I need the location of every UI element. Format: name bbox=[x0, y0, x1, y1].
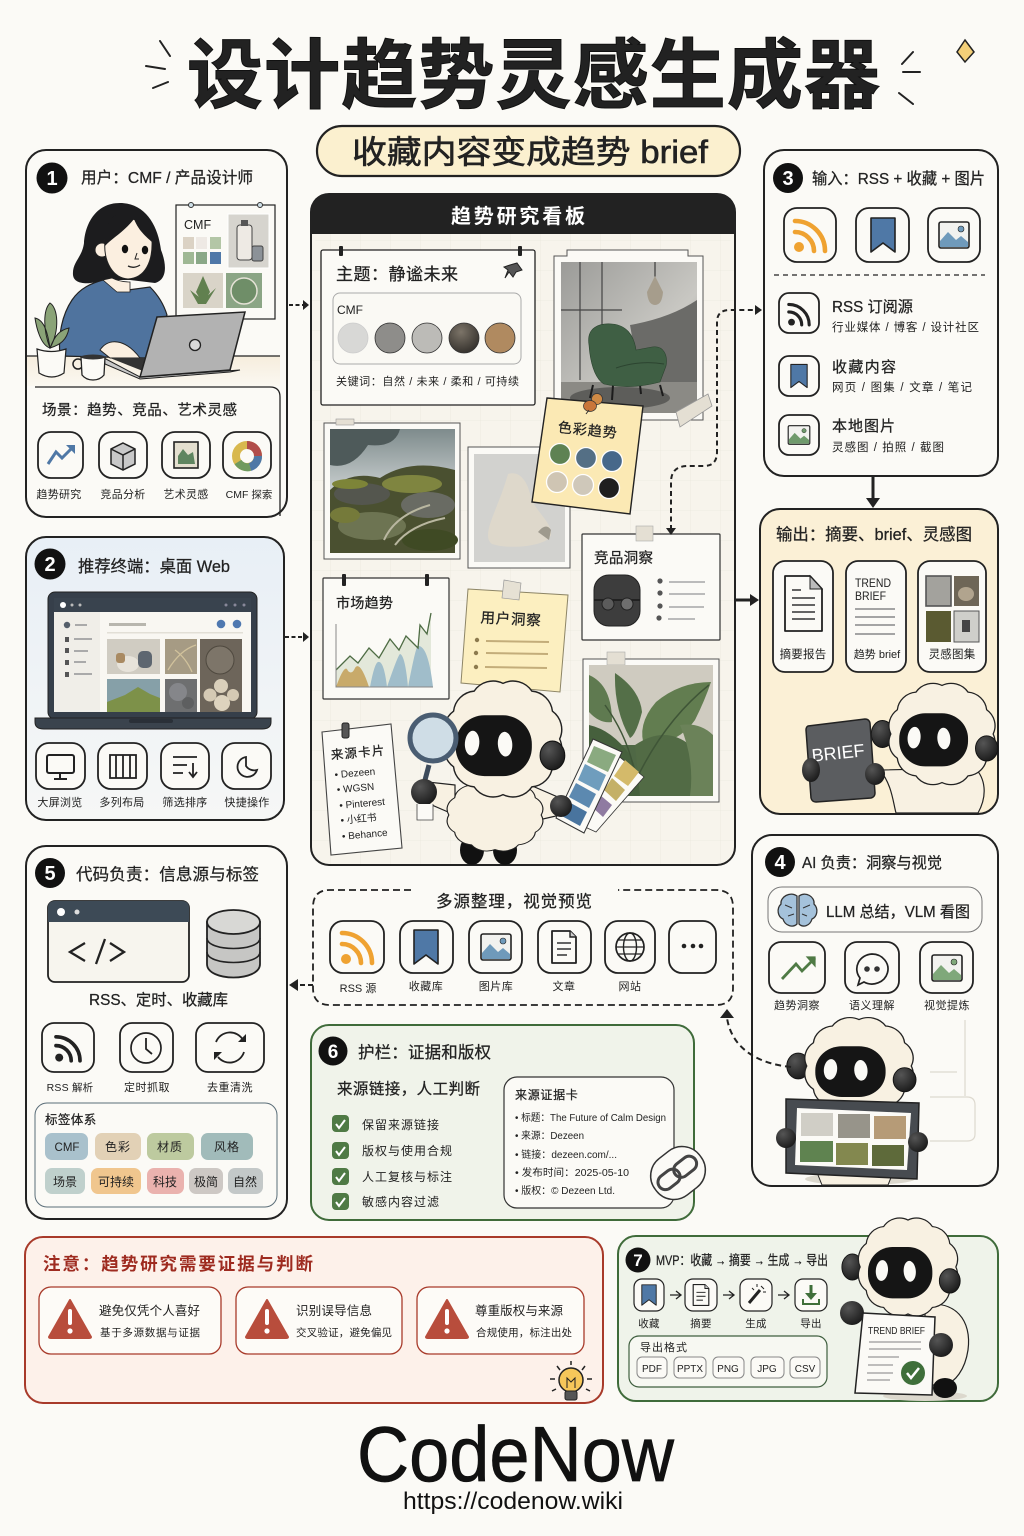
icon: RSS source: RSS 源 bbox=[340, 981, 376, 995]
card: trend brief: 趋势 brief bbox=[854, 648, 901, 661]
warning card 3: 尊重版权与来源 bbox=[475, 1303, 563, 1318]
icon: filter sort bbox=[161, 743, 209, 809]
row: saved content: 收藏内容 bbox=[832, 359, 896, 376]
card: source list: 来源卡片 bbox=[330, 744, 386, 762]
arrow bbox=[670, 1291, 681, 1299]
colour swatch fan bbox=[556, 739, 644, 833]
warning card 3: 合规使用，标注出处 bbox=[476, 1326, 572, 1339]
icon: color wheel bbox=[223, 432, 272, 501]
title: 设计趋势灵感生成器 bbox=[187, 34, 880, 119]
earbuds case bbox=[594, 575, 640, 626]
tags: 风格 bbox=[214, 1139, 240, 1154]
mascot: sheep with magnifier and swatches bbox=[410, 681, 644, 865]
potted plant bbox=[35, 303, 69, 377]
trend brief document bbox=[855, 1313, 935, 1395]
badge 6: 6 bbox=[328, 1042, 338, 1063]
card: source list: • 小红书 bbox=[340, 811, 377, 827]
subtitle pill: 收藏内容变成趋势 brief bbox=[352, 134, 708, 170]
icon: multi column: 多列布局 bbox=[99, 795, 145, 809]
badge 4: 4 bbox=[774, 852, 786, 874]
icon: color wheel: CMF 探索 bbox=[226, 488, 272, 501]
badge 6 bbox=[318, 1036, 348, 1066]
checklist bbox=[332, 1115, 453, 1210]
icon: article: 文章 bbox=[552, 979, 576, 993]
flow step: generate: 生成 bbox=[745, 1317, 767, 1330]
icon: scheduled fetch bbox=[120, 1023, 173, 1094]
icon: competitor analysis: 竞品分析 bbox=[100, 487, 146, 501]
panel 3: input bbox=[764, 150, 998, 476]
flow step: export bbox=[795, 1279, 827, 1330]
trend brief document: TREND BRIEF bbox=[868, 1326, 925, 1337]
icon: art inspiration bbox=[162, 432, 210, 501]
flow step: generate bbox=[740, 1279, 772, 1330]
tags: 材质 bbox=[157, 1140, 183, 1154]
tags: 场景 bbox=[53, 1175, 77, 1189]
flow step: summary bbox=[685, 1279, 717, 1330]
LLM pill: LLM 总结，VLM 看图 bbox=[826, 903, 970, 921]
source evidence card: • 版权：© Dezeen Ltd. bbox=[515, 1184, 615, 1197]
icon: deduplicate: 去重清洗 bbox=[207, 1080, 253, 1094]
row: RSS subscription: 行业媒体 / 博客 / 设计社区 bbox=[832, 320, 979, 334]
icon: image library bbox=[469, 921, 522, 993]
subheading: source links: 来源链接，人工判断 bbox=[337, 1080, 480, 1098]
photo: green chair bbox=[554, 250, 703, 420]
card: competitor insight bbox=[582, 526, 720, 640]
icon: article bbox=[538, 921, 591, 993]
card: market trend: 市场趋势 bbox=[336, 595, 393, 611]
sticky note: colour trend bbox=[532, 394, 643, 514]
source evidence card: • 来源：Dezeen bbox=[515, 1129, 584, 1142]
flow step: export: 导出 bbox=[800, 1317, 822, 1330]
card: source list: • Dezeen bbox=[334, 767, 376, 781]
icon: visual extraction: 视觉提炼 bbox=[924, 998, 970, 1012]
icon: large screen bbox=[36, 743, 85, 809]
icon: filter sort: 筛选排序 bbox=[162, 795, 208, 809]
icon: website bbox=[605, 921, 655, 993]
code window bbox=[48, 901, 189, 982]
row: RSS subscription: RSS 订阅源 bbox=[832, 298, 913, 316]
checklist: 人工复核与标注 bbox=[362, 1169, 453, 1184]
icon: more bbox=[669, 921, 716, 973]
icon: RSS parsing: RSS 解析 bbox=[47, 1081, 94, 1094]
tags: 极简 bbox=[194, 1175, 218, 1189]
panel 7: MVP bbox=[618, 1218, 998, 1401]
icon: link badge bbox=[642, 1138, 714, 1208]
heading: MVP: MVP：收藏 → 摘要 → 生成 → 导出 bbox=[656, 1252, 828, 1268]
icon: trend research bbox=[36, 432, 83, 501]
heading: output: 输出：摘要、brief、灵感图 bbox=[776, 525, 972, 544]
arrow bbox=[723, 1291, 734, 1299]
LLM pill bbox=[768, 887, 982, 932]
heading: warning: 注意：趋势研究需要证据与判断 bbox=[43, 1254, 314, 1274]
arrow: terminal to board bbox=[285, 632, 309, 642]
illustration: designer at laptop bbox=[60, 203, 245, 379]
heading: user: 用户：CMF / 产品设计师 bbox=[81, 169, 253, 187]
badge 3 bbox=[773, 163, 803, 193]
theme card bbox=[321, 246, 535, 405]
tape bbox=[676, 394, 712, 427]
panel 1: user bbox=[26, 150, 287, 517]
row: local images bbox=[779, 415, 944, 455]
tags bbox=[45, 1133, 263, 1194]
subtitle pill bbox=[317, 126, 740, 176]
checklist: 版权与使用合规 bbox=[362, 1143, 453, 1158]
icon: RSS orange bbox=[784, 208, 836, 262]
heading: input: 输入：RSS + 收藏 + 图片 bbox=[812, 170, 985, 188]
mascot: sheep with trend brief bbox=[840, 1218, 969, 1401]
mascot: sheep with tablet bbox=[776, 1018, 928, 1185]
tags: 色彩 bbox=[105, 1140, 131, 1154]
laptop illustration bbox=[35, 592, 271, 729]
warning card 2: 交叉验证，避免偏见 bbox=[296, 1326, 392, 1339]
tablet gallery bbox=[786, 1099, 919, 1179]
tags: 可持续 bbox=[98, 1174, 134, 1189]
warning card 2: 识别误导信息 bbox=[296, 1303, 372, 1318]
scene heading: 场景：趋势、竞品、艺术灵感 bbox=[42, 401, 237, 419]
card: inspiration set: 灵感图集 bbox=[929, 647, 976, 661]
warning card 2 bbox=[236, 1287, 402, 1354]
panel: multi-source preview bbox=[313, 890, 733, 1005]
icon: trend insight: 趋势洞察 bbox=[774, 998, 820, 1012]
tags: 科技 bbox=[153, 1175, 177, 1189]
card: source list: • Pinterest bbox=[339, 797, 386, 812]
warning card 1: 避免仅凭个人喜好 bbox=[99, 1303, 200, 1318]
card: trend brief: BRIEF bbox=[855, 589, 886, 603]
warning card 1 bbox=[39, 1287, 221, 1354]
icon: light bulb bbox=[550, 1361, 592, 1400]
heading: multi-source: 多源整理，视觉预览 bbox=[436, 892, 592, 911]
caption: RSS, schedule, library: RSS、定时、收藏库 bbox=[89, 991, 228, 1009]
icon: image bbox=[928, 208, 980, 262]
dashed arrow: mascot to sources bbox=[720, 1009, 791, 1067]
icon: art inspiration: 艺术灵感 bbox=[163, 488, 209, 501]
export formats card: CSV bbox=[795, 1364, 816, 1375]
source evidence card: 来源证据卡 bbox=[515, 1088, 579, 1102]
row: RSS subscription bbox=[779, 293, 979, 334]
row: local images: 灵感图 / 拍照 / 截图 bbox=[832, 440, 944, 454]
heading: AI: AI 负责：洞察与视觉 bbox=[802, 854, 942, 872]
moodboard card: CMF bbox=[184, 218, 211, 232]
theme card: CMF bbox=[337, 303, 363, 317]
icon: orange pin bbox=[584, 394, 602, 414]
source evidence card: • 发布时间：2025-05-10 bbox=[515, 1166, 629, 1179]
tags: CMF bbox=[55, 1142, 79, 1154]
CMF material swatches bbox=[338, 323, 515, 353]
source evidence card bbox=[504, 1077, 674, 1208]
card: summary report bbox=[773, 561, 833, 672]
icon: image library: 图片库 bbox=[479, 980, 513, 993]
url: https://codenow.wiki bbox=[403, 1488, 623, 1515]
icon: quick action bbox=[222, 743, 271, 809]
photo: moss stones bbox=[324, 419, 460, 559]
icon: multi column bbox=[98, 743, 147, 809]
panel 5: code bbox=[26, 846, 287, 1219]
card: trend brief: TREND bbox=[855, 576, 891, 590]
logo: CodeNow: CodeNow bbox=[357, 1410, 675, 1498]
panel 6: guardrails bbox=[311, 1025, 714, 1220]
heading: code: 代码负责：信息源与标签 bbox=[76, 865, 259, 884]
photo: stone sculpture bbox=[468, 447, 570, 568]
icon: deduplicate bbox=[196, 1023, 264, 1094]
icon: website: 网站 bbox=[618, 979, 642, 993]
sticky note: user insight bbox=[461, 580, 568, 692]
faint ghost lines bbox=[930, 1020, 975, 1141]
icon: visual extraction bbox=[920, 942, 973, 1012]
heading: guardrails: 护栏：证据和版权 bbox=[358, 1043, 491, 1062]
icon: collection bbox=[400, 921, 453, 993]
photo: green leaves bbox=[583, 652, 719, 802]
warning card 3 bbox=[417, 1287, 584, 1354]
panel 4: AI bbox=[752, 835, 998, 1186]
icon: scheduled fetch: 定时抓取 bbox=[124, 1080, 170, 1094]
theme card: 主题：静谧未来 bbox=[336, 265, 458, 284]
icon: pin bbox=[504, 263, 522, 278]
tag system card bbox=[35, 1103, 277, 1207]
flow step: collect: 收藏 bbox=[638, 1317, 660, 1330]
checklist: 保留来源链接 bbox=[362, 1117, 440, 1132]
export formats card: JPG bbox=[757, 1364, 777, 1375]
badge 7 bbox=[626, 1248, 650, 1272]
sticky note: user insight: 用户洞察 bbox=[480, 608, 542, 630]
export formats card: PPTX bbox=[677, 1364, 703, 1375]
checklist: 敏感内容过滤 bbox=[362, 1194, 440, 1209]
coffee mug bbox=[73, 354, 105, 380]
icon: brain bbox=[778, 894, 817, 926]
row: saved content bbox=[779, 356, 972, 396]
badge 3: 3 bbox=[782, 168, 794, 190]
board title: 趋势研究看板 bbox=[451, 204, 585, 228]
panel: output bbox=[760, 509, 998, 814]
arrow: sources to code bbox=[289, 979, 313, 991]
tags: 自然 bbox=[233, 1174, 257, 1189]
icon: collection: 收藏库 bbox=[409, 979, 443, 993]
card: summary report: 摘要报告 bbox=[780, 647, 826, 661]
panel 2: recommended terminal bbox=[26, 537, 284, 820]
theme card: 关键词：自然 / 未来 / 柔和 / 可持续 bbox=[336, 374, 519, 388]
sticky note: colour trend: 色彩趋势 bbox=[557, 419, 619, 441]
icon: semantic understanding: 语义理解 bbox=[849, 998, 895, 1012]
solid arrow: board to output bbox=[735, 594, 759, 606]
icon: competitor analysis bbox=[99, 432, 147, 501]
dashed arrow: board to input bbox=[666, 305, 762, 535]
badge 1 bbox=[36, 162, 68, 194]
flow step: summary: 摘要 bbox=[690, 1317, 712, 1330]
desk bbox=[27, 356, 280, 386]
heading: terminal: 推荐终端：桌面 Web bbox=[78, 557, 230, 576]
icon: trend research: 趋势研究 bbox=[36, 487, 82, 501]
badge 2: 2 bbox=[44, 554, 56, 576]
tag system card: 标签体系 bbox=[45, 1112, 97, 1127]
icon: RSS parsing bbox=[42, 1023, 94, 1094]
panel: warning bbox=[25, 1237, 603, 1403]
warning card 1: 基于多源数据与证据 bbox=[100, 1326, 200, 1339]
badge 5: 5 bbox=[44, 863, 56, 885]
book: BRIEF: BRIEF bbox=[811, 740, 866, 766]
desk edge bbox=[27, 355, 280, 357]
scene card bbox=[35, 387, 280, 516]
export formats card: PNG bbox=[717, 1364, 739, 1375]
icon: bookmark bbox=[856, 208, 909, 262]
central board bbox=[311, 194, 735, 865]
icon: semantic understanding bbox=[845, 942, 899, 1012]
export formats card: 导出格式 bbox=[640, 1340, 688, 1354]
book: BRIEF bbox=[806, 719, 875, 802]
badge 2 bbox=[34, 548, 66, 580]
card: market trend bbox=[323, 574, 449, 699]
source evidence card: • 链接：dezeen.com/... bbox=[515, 1148, 617, 1161]
card: source list bbox=[322, 723, 402, 855]
export formats card: PDF bbox=[642, 1364, 662, 1375]
arrow bbox=[778, 1291, 789, 1299]
database bbox=[207, 910, 260, 978]
moodboard card bbox=[176, 202, 275, 319]
icon: trend insight bbox=[769, 942, 825, 1012]
mascot: sheep with brief book bbox=[802, 683, 998, 813]
export formats card bbox=[629, 1336, 827, 1387]
area chart bbox=[336, 613, 433, 687]
card: source list: • Behance bbox=[342, 828, 389, 843]
arrow: user to board bbox=[289, 300, 309, 310]
flow step: collect bbox=[634, 1279, 664, 1330]
icon: large screen: 大屏浏览 bbox=[37, 795, 83, 809]
row: local images: 本地图片 bbox=[832, 418, 895, 435]
row: saved content: 网页 / 图集 / 文章 / 笔记 bbox=[832, 380, 972, 394]
badge 7: 7 bbox=[633, 1251, 643, 1270]
source evidence card: • 标题：The Future of Calm Design bbox=[515, 1112, 666, 1124]
badge 1: 1 bbox=[46, 168, 58, 190]
card: competitor insight: 竞品洞察 bbox=[594, 549, 653, 567]
card: inspiration set bbox=[918, 561, 986, 672]
icon: quick action: 快捷操作 bbox=[224, 795, 270, 809]
card: trend brief bbox=[846, 561, 906, 672]
magnifier bbox=[410, 715, 456, 820]
badge 5 bbox=[35, 858, 65, 888]
badge 4 bbox=[765, 847, 795, 877]
icon: RSS source bbox=[330, 921, 384, 995]
card: source list: • WGSN bbox=[336, 782, 375, 796]
solid arrow: input to output bbox=[866, 476, 880, 508]
